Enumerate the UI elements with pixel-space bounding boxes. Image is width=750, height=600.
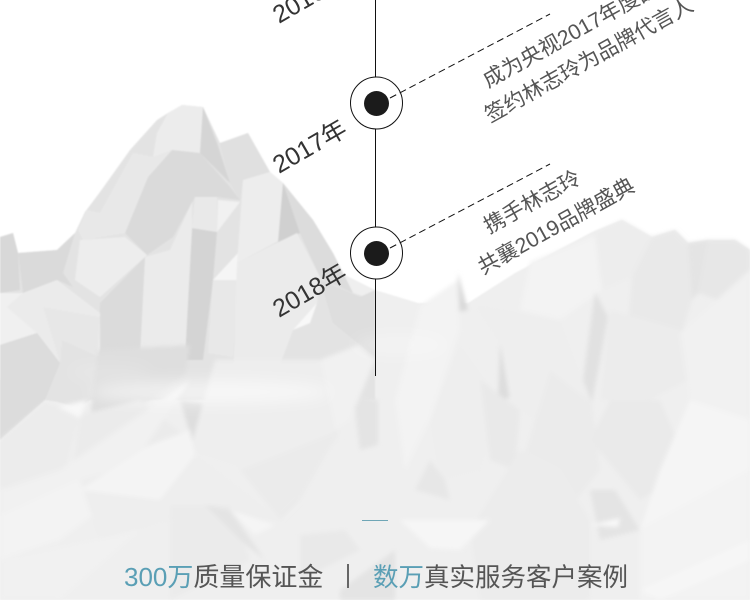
cloud mist bbox=[70, 335, 445, 404]
year label: 2018: 2018年 bbox=[268, 259, 352, 323]
year label: 2017: 2017年 bbox=[268, 115, 352, 179]
description: 2018: 共襄2019品牌盛典 bbox=[474, 173, 639, 279]
timeline node: 2018 bbox=[350, 227, 402, 279]
dashed leader: 2018 bbox=[390, 164, 550, 248]
right mountain range bbox=[0, 220, 750, 600]
cases statement: 数万真实服务客户案例 bbox=[373, 564, 628, 592]
timeline node: 2017 bbox=[350, 77, 402, 129]
foreground snow facets bbox=[0, 345, 395, 600]
separator bbox=[347, 564, 349, 588]
guarantee statement: 300万质量保证金 bbox=[124, 562, 323, 592]
left mountain range bbox=[0, 105, 375, 440]
dashed leader: 2017 bbox=[390, 14, 550, 98]
description: 2018: 携手林志玲 bbox=[480, 166, 585, 238]
accent divider bbox=[362, 520, 388, 521]
timeline axis bbox=[375, 0, 376, 376]
